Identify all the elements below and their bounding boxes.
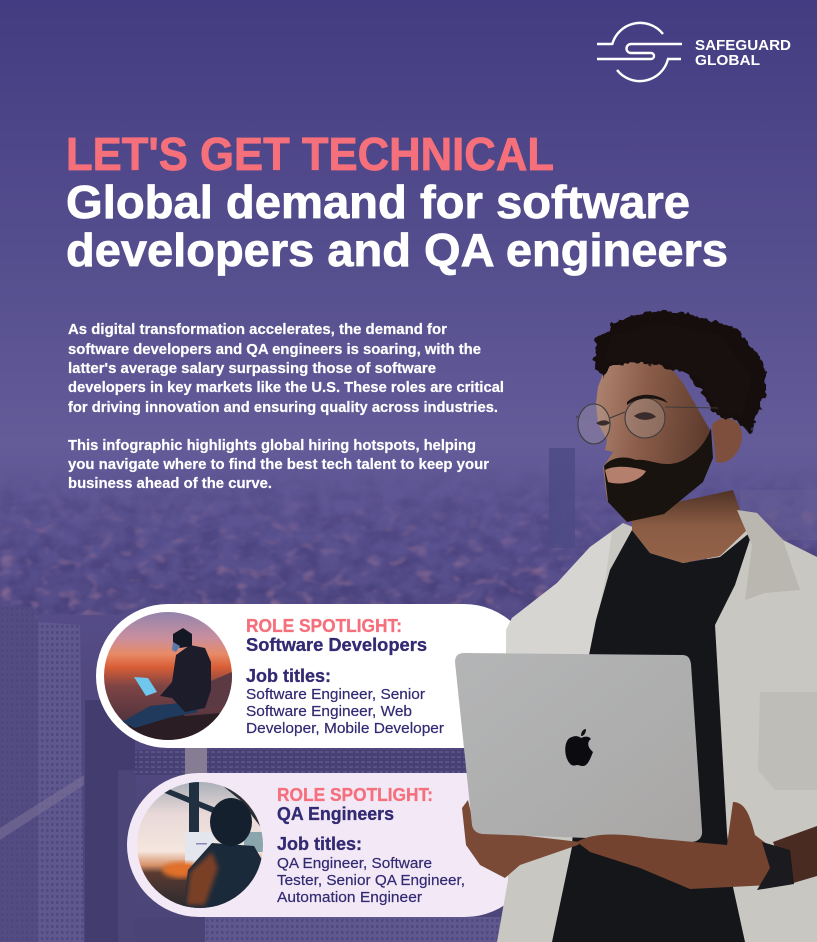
panel: QA engineers role spotlight [127,773,537,917]
intro text: developers in key markets like the U.S. These roles are critical [68,380,504,396]
text: QA engineers: QA Engineers [277,804,394,824]
intro text: This infographic highlights global hiring hotspots, helping [68,438,476,454]
text: QA engineers: QA Engineer, Software [277,855,432,872]
photo: man holding a laptop [455,310,817,942]
heading: developers and QA engineers [66,224,728,276]
text: software developers: Job titles: [246,666,331,686]
text: QA engineers: Tester, Senior QA Engineer, [277,872,465,889]
text: software developers [246,616,444,737]
photo: QA engineer at a monitor by a window [137,782,265,908]
ear [712,418,742,463]
jacket [497,510,817,942]
intro text: business ahead of the curve. [68,476,272,492]
apple logo [565,729,593,766]
t-shirt [552,530,753,942]
text: software developers: Software Developers [246,635,427,655]
text: QA engineers: ROLE SPOTLIGHT: [277,785,433,805]
jacket collar [737,510,800,600]
lips [605,467,646,484]
intro text: software developers and QA engineers is soaring, with the [68,342,481,358]
logo wordmark: GLOBAL [695,53,760,69]
intro text: As digital transformation accelerates, the demand for [68,322,447,338]
glasses [576,398,718,444]
logo: SafeGuard Global [597,23,791,81]
heading: Global demand for software [66,176,690,228]
heading: LET'S GET TECHNICAL [66,128,554,180]
forearm [773,826,817,884]
panel: software developers role spotlight [96,604,536,748]
text: software developers: Software Engineer, Senior [246,686,425,703]
text: software developers: ROLE SPOTLIGHT: [246,616,402,636]
intro text [68,322,504,492]
intro text: latter's average salary surpassing those of software [68,361,436,377]
face [596,357,712,522]
heading [66,128,728,276]
eyes [634,412,656,420]
background: city skyline [0,448,817,942]
text: software developers: Software Engineer, Web [246,703,412,720]
text: QA engineers [277,785,465,906]
jacket pocket [758,692,817,790]
neck [632,490,747,563]
logo wordmark: SAFEGUARD [695,38,791,54]
hand left [462,800,580,878]
photo: developer on a rooftop at sunset [104,612,232,740]
logo mark [597,23,682,81]
text: software developers: Developer, Mobile Developer [246,720,444,737]
text: QA engineers: Job titles: [277,834,362,854]
watch [757,842,794,890]
laptop [455,653,702,842]
intro text: for driving innovation and ensuring quality across industries. [68,400,498,416]
logo wordmark [695,38,791,69]
hand right [577,802,775,889]
text: QA engineers: Automation Engineer [277,889,422,906]
hair [594,310,768,434]
beard [604,428,713,522]
intro text: you navigate where to find the best tech talent to keep your [68,457,489,473]
